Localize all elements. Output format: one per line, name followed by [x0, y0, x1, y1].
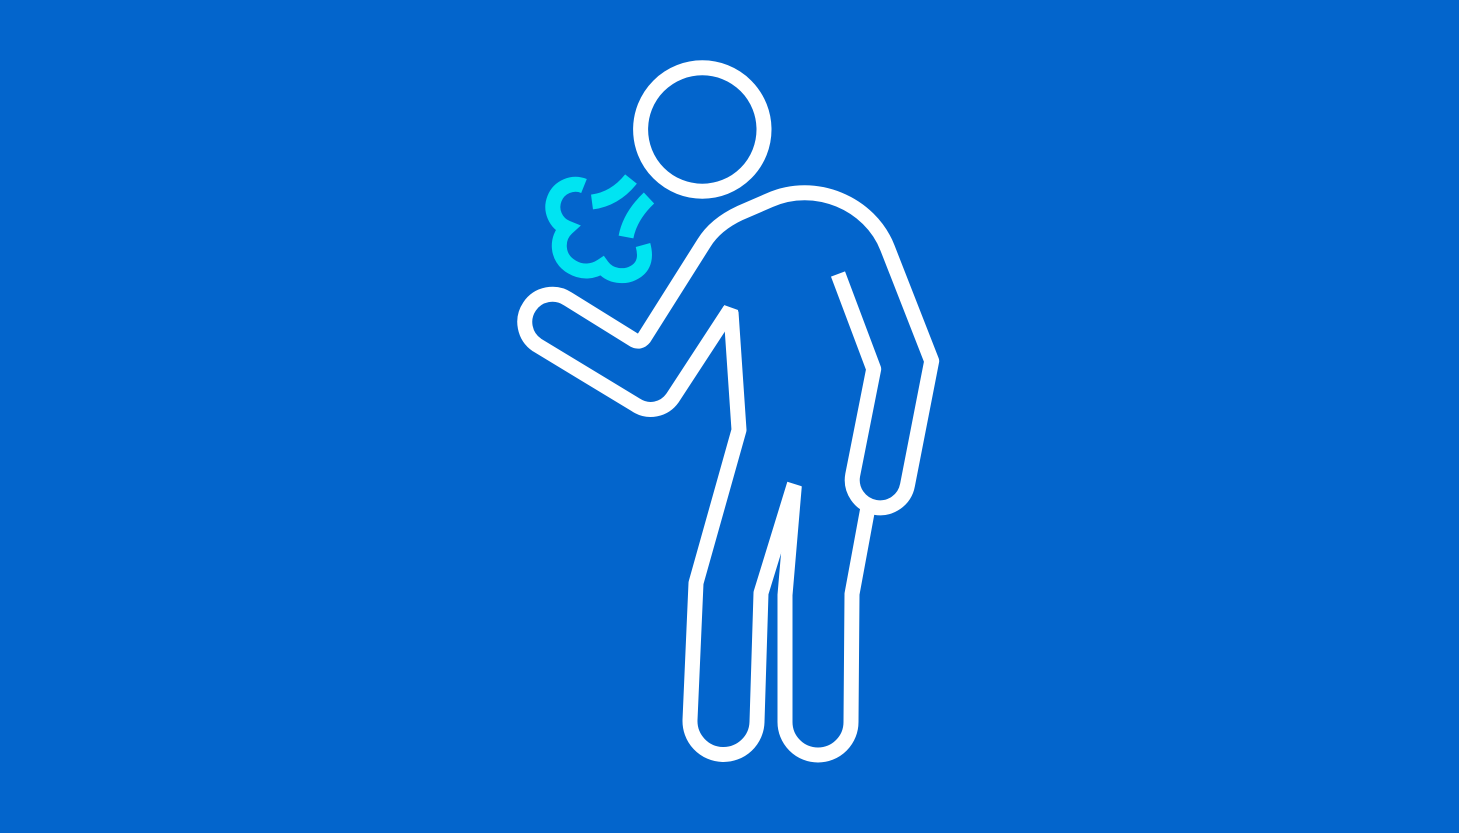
icon: cough cloud [553, 179, 649, 276]
icon: person figure [525, 68, 932, 755]
cloud puff [553, 184, 644, 276]
cough droplet arc upper [592, 179, 631, 202]
legs outline [690, 312, 794, 754]
inner right leg and outer right leg [785, 486, 868, 755]
torso, raised arm and hanging arm outline [525, 193, 932, 508]
head [641, 68, 764, 191]
cough droplet arc lower [626, 198, 649, 237]
armpit tip [724, 305, 739, 326]
